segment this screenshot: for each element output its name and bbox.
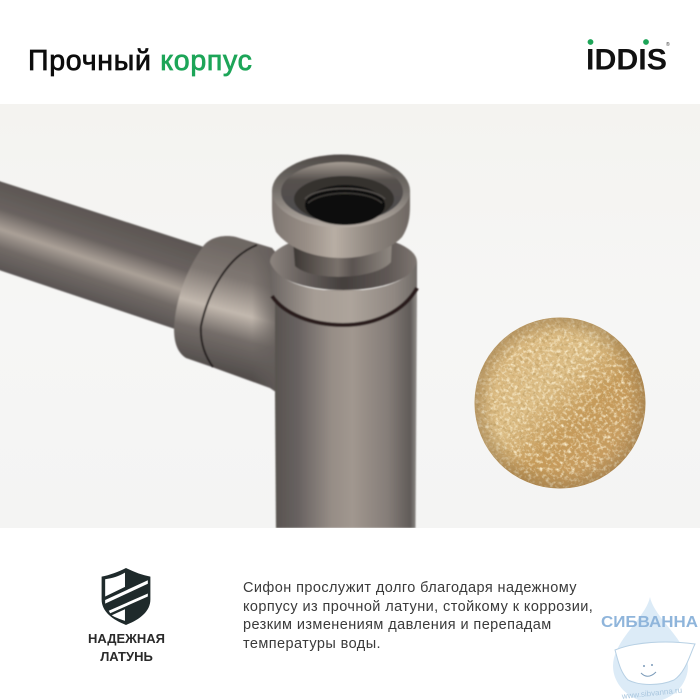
description text: температуры воды. (243, 636, 381, 652)
elbow collar (174, 236, 282, 396)
logo: IDDIS: IDDIS (586, 44, 667, 76)
top ring outer (272, 190, 410, 258)
vertical body (275, 290, 417, 528)
horizontal pipe (0, 180, 204, 330)
description text: корпусу из прочной латуни, стойкому к коррозии, (243, 599, 593, 615)
icon label: НАДЕЖНАЯ (88, 631, 165, 646)
flange band (270, 262, 417, 325)
logo: IDDIS: ® (666, 41, 670, 48)
thread (294, 176, 394, 222)
siphon (0, 154, 417, 528)
bore (305, 185, 385, 225)
neck (293, 240, 392, 277)
watermark: Сибванна: СИБВАННА (601, 614, 698, 631)
description text: резким изменениям давления и перепадам (243, 617, 552, 633)
description text: Сифон прослужит долго благодаря надежному (243, 580, 577, 596)
icon label (88, 631, 165, 664)
description text (243, 580, 593, 652)
lower flange top (270, 234, 417, 290)
top ring rim (272, 154, 410, 228)
panel: product photo (0, 104, 700, 528)
elbow blend (252, 242, 282, 396)
watermark: Сибванна (601, 598, 698, 700)
icon label: ЛАТУНЬ (100, 648, 153, 664)
collar seam (201, 245, 257, 367)
brass sphere (474, 318, 646, 488)
black seam ring (272, 288, 417, 325)
title: Прочный корпус (28, 45, 253, 77)
icon: shield (102, 568, 150, 625)
ring interior (281, 162, 403, 222)
